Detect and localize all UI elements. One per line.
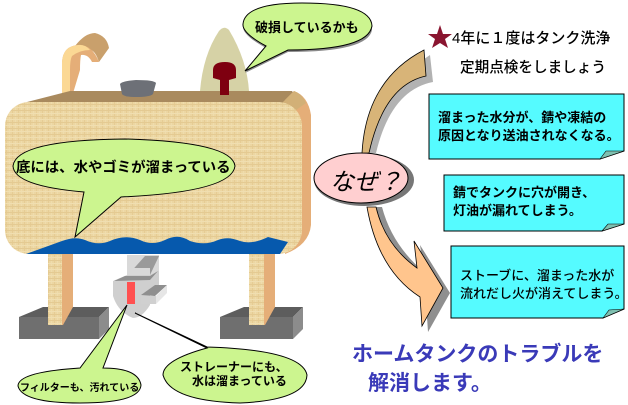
callout: water and dirt at bottom [13, 139, 235, 237]
star [428, 25, 452, 48]
callout: filter dirty [18, 305, 141, 403]
note: rust makes holes: 錆でタンクに穴が開き、 [453, 185, 595, 200]
note: stove flame goes out: 流れだし火が消えてしまう。 [460, 286, 628, 301]
strainer [113, 255, 167, 318]
tank right side face [285, 91, 311, 254]
gauge: tall cover behind red cap [200, 28, 249, 91]
note: rust makes holes: 灯油が漏れてしまう。 [453, 203, 582, 218]
water at tank bottom [26, 237, 288, 254]
callout: water and dirt at bottom: 底には、水やゴミが溜まっている [16, 158, 231, 176]
tank assembly [5, 28, 311, 254]
note: water causes rust: 溜まった水分が、錆や凍結の [438, 110, 606, 125]
closing message [352, 342, 603, 395]
note: water causes rust [429, 94, 624, 159]
callout: damaged cap: 破損しているかも [255, 20, 359, 35]
callout: why [314, 153, 414, 206]
heading: inspect every 4 years: 定期点検をしましょう [460, 59, 606, 76]
note: rust makes holes [444, 175, 624, 231]
note: stove flame goes out [451, 246, 628, 318]
closing message: ホームタンクのトラブルを [352, 342, 603, 366]
heading: inspect every 4 years: 4年に１度はタンク洗浄 [452, 30, 610, 47]
pipe: vent pipe on tank [62, 33, 109, 100]
oil cap: grey lid [120, 80, 156, 97]
callout: strainer water: ストレーナーにも、 [180, 360, 288, 374]
callout: strainer water [135, 313, 307, 403]
red filter [127, 282, 135, 304]
arrow: up to the star note [362, 50, 433, 153]
heading: inspect every 4 years [452, 30, 610, 76]
left leg and base block [19, 254, 109, 339]
right leg and base block [220, 254, 303, 339]
red filler cap [213, 62, 236, 95]
callout: why: なぜ？ [330, 169, 402, 196]
note: stove flame goes out: ストーブに、溜まった水が [460, 268, 614, 283]
closing message: 解消します。 [368, 372, 492, 395]
callout: damaged cap [243, 3, 372, 73]
tank body [5, 102, 302, 254]
callout: filter dirty: フィルターも、汚れている [20, 381, 139, 394]
tank top face [27, 91, 302, 105]
arrow: down to the notes [367, 207, 450, 332]
note: water causes rust: 原因となり送油されなくなる。 [438, 128, 620, 143]
callout: strainer water: 水は溜まっている [192, 373, 287, 388]
